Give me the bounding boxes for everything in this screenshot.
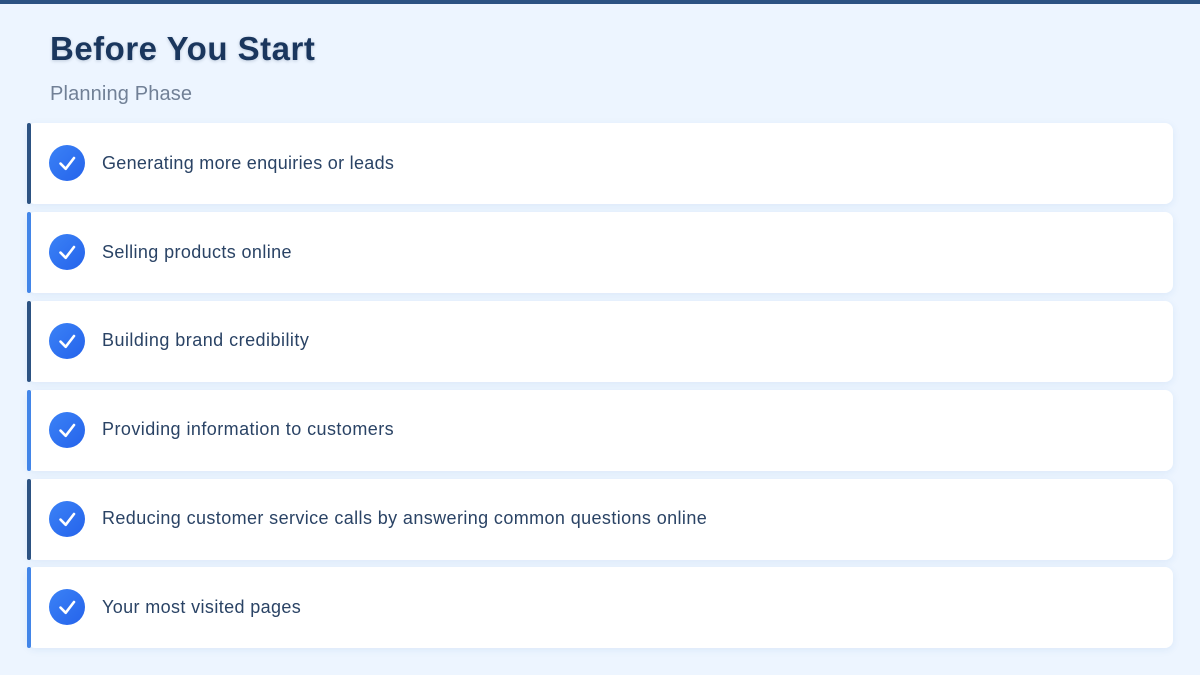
item text: Reducing customer service calls by answering common questions online (102, 508, 707, 528)
item text: Providing information to customers (102, 419, 394, 439)
icon: check circle (49, 145, 85, 181)
top accent bar (0, 0, 1200, 4)
list item 5 (27, 479, 1173, 560)
item text: Your most visited pages (102, 597, 301, 617)
list item 1 (27, 123, 1173, 204)
icon: check circle (49, 323, 85, 359)
icon: check circle (49, 234, 85, 270)
icon: check circle (49, 501, 85, 537)
list item 3 (27, 301, 1173, 382)
subtitle: Planning Phase (50, 83, 192, 105)
list item 4 (27, 390, 1173, 471)
icon: check circle (49, 412, 85, 448)
item text: Selling products online (102, 242, 292, 262)
item text: Generating more enquiries or leads (102, 153, 394, 173)
icon: check circle (49, 589, 85, 625)
list item 6 (27, 567, 1173, 648)
title: Before You Start (50, 30, 315, 67)
list item 2 (27, 212, 1173, 293)
item text: Building brand credibility (102, 330, 309, 350)
